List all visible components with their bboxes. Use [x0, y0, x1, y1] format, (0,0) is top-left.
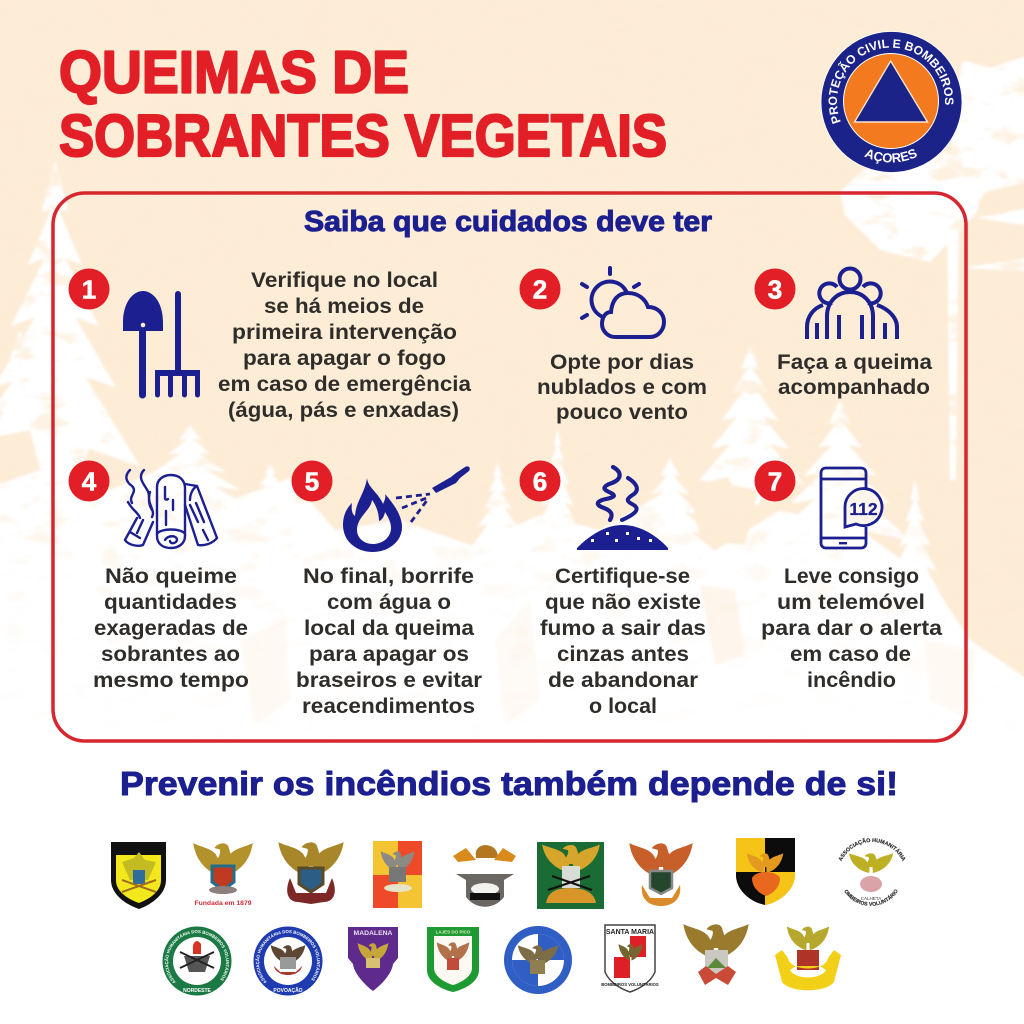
- text 7: para dar o alerta: [761, 616, 943, 640]
- text 3: acompanhado: [778, 375, 930, 399]
- text 1: primeira intervenção: [232, 320, 457, 344]
- badge: green round Nordeste: ASSOCIAÇÃO HUMANITÁRIA DOS BOMBEIROS VOLUNTÁRIOS: [164, 930, 229, 984]
- text 1: [218, 268, 472, 422]
- text 1: (água, pás e enxadas): [228, 398, 459, 422]
- step 1: [68, 268, 472, 422]
- badge: Calheta association: CALHETA: [861, 896, 881, 901]
- title: [59, 40, 667, 169]
- step 2: [520, 268, 707, 424]
- title: SOBRANTES VEGETAIS: [59, 103, 667, 169]
- badge: Ribeira Grande gold: [775, 926, 841, 990]
- badge: Calheta association: BOMBEIROS VOLUNTÁRIOS: [844, 890, 898, 906]
- badge: Santa Maria shield: BOMBEIROS VOLUNTÁRIOS: [601, 982, 659, 987]
- badge: eagle, founded 1879: Fundada em 1879: [194, 900, 252, 907]
- text 5: local da queima: [304, 616, 475, 640]
- text 5: No final, borrife: [303, 564, 474, 588]
- slogan: Prevenir os incêndios também depende de si!: [120, 765, 898, 802]
- text 5: braseiros e evitar: [296, 668, 483, 692]
- number badge 1: [68, 268, 110, 310]
- text 4: quantidades: [104, 590, 237, 614]
- badge: green round Nordeste: NORDESTE: [183, 988, 212, 994]
- text 2: Opte por dias: [550, 350, 694, 374]
- text 7: [761, 564, 943, 692]
- badge: eagle, founded 1879: [193, 843, 253, 907]
- icon: group of people: [807, 268, 897, 339]
- text 6: cinzas antes: [557, 642, 689, 666]
- text 5: reacendimentos: [302, 694, 475, 718]
- badge: Santa Maria shield: SANTA MARIA: [606, 929, 654, 936]
- badge: yellow and black shield: [736, 838, 795, 905]
- text 3: [777, 350, 933, 399]
- text 6: Certifique-se: [555, 564, 690, 588]
- logo: Proteção Civil e Bombeiros Açores: PROTEÇÃO CIVIL E BOMBEIROS: [828, 39, 954, 124]
- icon: logs with smoke: [125, 470, 217, 548]
- text 4: Não queime: [105, 564, 237, 588]
- text 7: Leve consigo: [784, 564, 919, 588]
- badge: eagle with blue shield: [278, 842, 344, 904]
- number badge 6: 6: [533, 466, 547, 496]
- text 6: [540, 564, 706, 718]
- text 7: um telemóvel: [777, 590, 925, 614]
- icon: sun and cloud: [582, 268, 664, 337]
- badge: Santa Maria shield: [601, 925, 659, 992]
- text 1: se há meios de: [264, 294, 424, 318]
- badge: purple Madalena shield: [348, 927, 398, 991]
- number badge 7: [754, 460, 796, 502]
- text 6: que não existe: [545, 590, 701, 614]
- number badge 1: 1: [82, 274, 96, 304]
- text 5: para apagar os: [309, 642, 469, 666]
- step 6: [520, 460, 706, 718]
- text 5: [296, 564, 483, 718]
- badge: blue round with eagle: [504, 926, 572, 994]
- badge: fire helmet and crown: [453, 845, 516, 907]
- badge: orange eagle: [629, 843, 693, 906]
- text 4: [93, 564, 249, 692]
- text 7: incêndio: [807, 668, 896, 692]
- logo: Proteção Civil e Bombeiros Açores: AÇORES: [864, 149, 917, 164]
- step 4: [68, 460, 249, 692]
- panel heading: Saiba que cuidados deve ter: [304, 206, 712, 238]
- text 2: nublados e com: [537, 375, 707, 399]
- text 4: exageradas de: [94, 616, 248, 640]
- icon: phone with 112 bubble: [821, 468, 882, 548]
- number badge 2: [520, 268, 560, 310]
- text 7: em caso de: [790, 642, 911, 666]
- step 5: [292, 460, 483, 718]
- number badge 3: 3: [768, 274, 782, 304]
- icon: smoking ash mound: [577, 467, 668, 550]
- text 1: para apagar o fogo: [243, 346, 446, 370]
- step 3: [754, 268, 933, 399]
- icon: flame and spray nozzle: [343, 466, 470, 552]
- text 1: Verifique no local: [251, 268, 438, 292]
- text 6: fumo a sair das: [540, 616, 706, 640]
- text 2: [537, 350, 707, 424]
- badge: Calheta association: [838, 838, 906, 906]
- title: QUEIMAS DE: [59, 40, 409, 106]
- number badge 5: [292, 460, 332, 502]
- text 4: sobrantes ao: [101, 642, 240, 666]
- text 6: o local: [589, 694, 657, 718]
- badge: green Lajes do Pico shield: LAJES DO PICO: [436, 930, 471, 934]
- number badge 3: [754, 268, 796, 310]
- number badge 2: 2: [533, 274, 547, 304]
- badge: blue round Povoação: ASSOCIAÇÃO HUMANITÁRIA DOS BOMBEIROS VOLUNTÁRIOS: [255, 930, 320, 984]
- text 5: com água o: [327, 590, 451, 614]
- icon: shovel and rake: [123, 291, 200, 398]
- text 3: Faça a queima: [777, 350, 933, 374]
- text 4: mesmo tempo: [93, 668, 249, 692]
- panel: care instructions: [53, 193, 966, 741]
- badge: eagle with green hill: [683, 924, 749, 985]
- number badge 4: [68, 460, 110, 502]
- icon: phone with 112 bubble: 112: [849, 499, 878, 519]
- logo: Proteção Civil e Bombeiros Açores: [820, 31, 962, 172]
- badge: Calheta association: ASSOCIAÇÃO HUMANITÁRIA: [838, 838, 906, 862]
- badge: blue round Povoação: POVOAÇÃO: [273, 987, 303, 994]
- background: forest silhouette: [0, 0, 1024, 723]
- badge: purple Madalena shield: MADALENA: [354, 930, 393, 937]
- badge: green Lajes do Pico shield: [427, 927, 479, 992]
- badge: green square: [537, 842, 604, 909]
- step 7: [754, 460, 943, 692]
- text 6: de abandonar: [548, 668, 699, 692]
- number badge 4: 4: [82, 466, 97, 496]
- number badge 5: 5: [305, 466, 319, 496]
- badge: black and yellow shield: [111, 842, 166, 909]
- number badge 7: 7: [768, 466, 782, 496]
- number badge 6: [520, 460, 560, 502]
- badge: red and yellow quartered: [373, 841, 422, 908]
- text 2: pouco vento: [556, 400, 688, 424]
- text 1: em caso de emergência: [218, 372, 472, 396]
